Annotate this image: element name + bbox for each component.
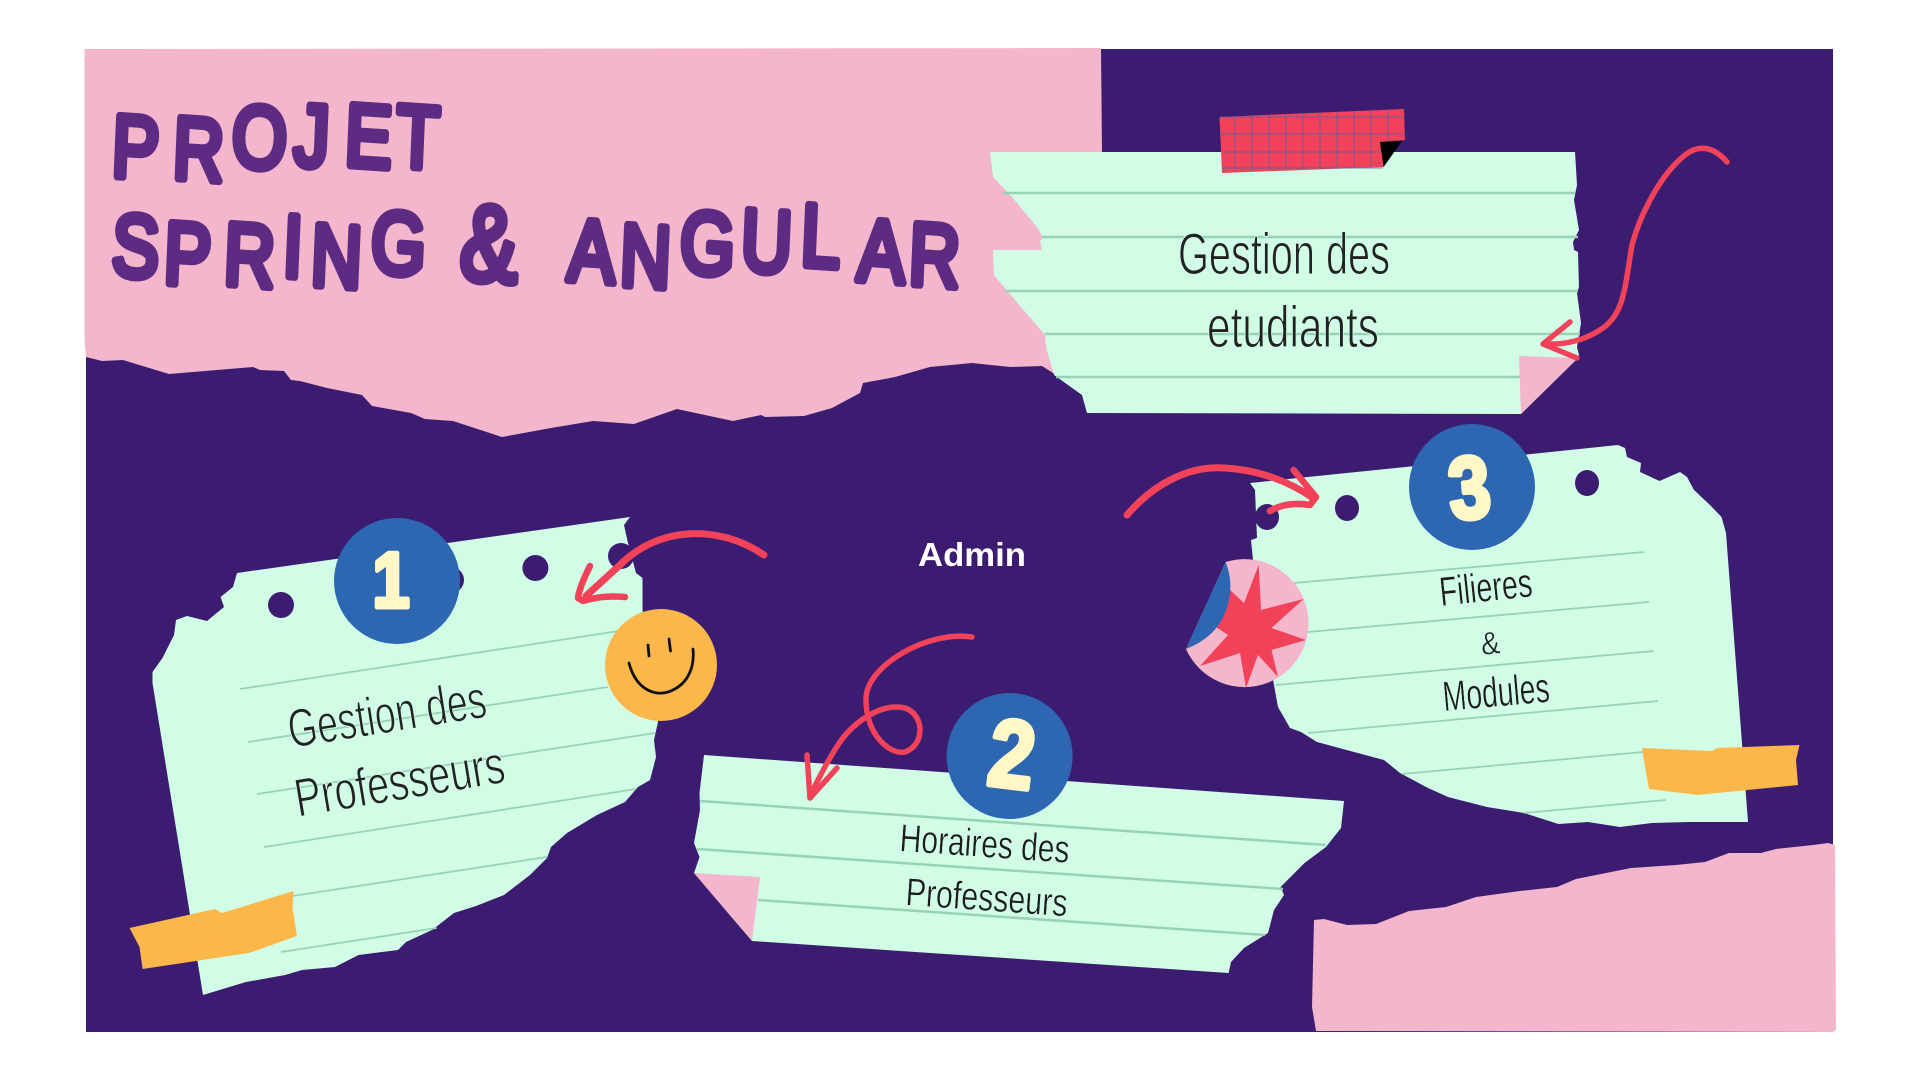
tape: orange on note 1: [130, 891, 297, 969]
text: Gestion des etudiants: [1178, 222, 1390, 360]
label: Admin: Admin: [918, 536, 1026, 573]
panel: note 2 Horaires des Professeurs: [694, 755, 1344, 973]
text: Gestion des Professeurs: [283, 669, 509, 829]
washi tape: red grid: [1220, 109, 1405, 173]
text: Filieres et Modules: [1437, 559, 1551, 720]
folded corner: [694, 873, 760, 941]
panel: note 3 Filieres et Modules: [1250, 445, 1748, 827]
number badge 2: [947, 693, 1073, 819]
arrow: to note etudiants: [1543, 148, 1727, 358]
number badge 3: [1409, 424, 1535, 550]
number badge 3: 3: [1444, 438, 1494, 539]
text: Filieres et Modules: Filieres: [1437, 559, 1534, 615]
panel: torn pink paper top left: [84, 48, 1102, 437]
text: Horaires des Professeurs: Professeurs: [904, 871, 1069, 925]
text: Filieres et Modules: Modules: [1441, 664, 1551, 720]
text: Gestion des Professeurs: Gestion des: [283, 669, 490, 760]
number badge 1: [334, 518, 460, 644]
panel: note Gestion des etudiants: [990, 152, 1581, 414]
text: Gestion des Professeurs: Professeurs: [290, 735, 509, 829]
arrow: to note 3: [1127, 468, 1316, 515]
title: SPRING & ANGULAR: [110, 181, 962, 307]
folded corner: [1519, 356, 1578, 414]
icon: star sticker: [1186, 559, 1309, 688]
text: Filieres et Modules: &: [1479, 624, 1502, 662]
number badge 1: 1: [373, 537, 409, 624]
text: Horaires des Professeurs: [898, 817, 1071, 925]
tape: orange on note 3: [1642, 745, 1800, 795]
arrow: to note 1: [578, 534, 764, 601]
panel: torn pink paper bottom right: [1312, 843, 1836, 1032]
number badge 2: 2: [983, 698, 1041, 810]
text: Horaires des Professeurs: Horaires des: [898, 817, 1071, 872]
text: Gestion des etudiants: Gestion des: [1178, 222, 1390, 287]
arrow: to note 2: [807, 636, 972, 798]
title: PROJET: [110, 86, 441, 200]
title: [110, 86, 962, 307]
panel: note 1 Gestion des Professeurs: [152, 517, 658, 995]
text: Gestion des etudiants: etudiants: [1207, 295, 1379, 360]
icon: smiley sticker: [605, 609, 717, 721]
